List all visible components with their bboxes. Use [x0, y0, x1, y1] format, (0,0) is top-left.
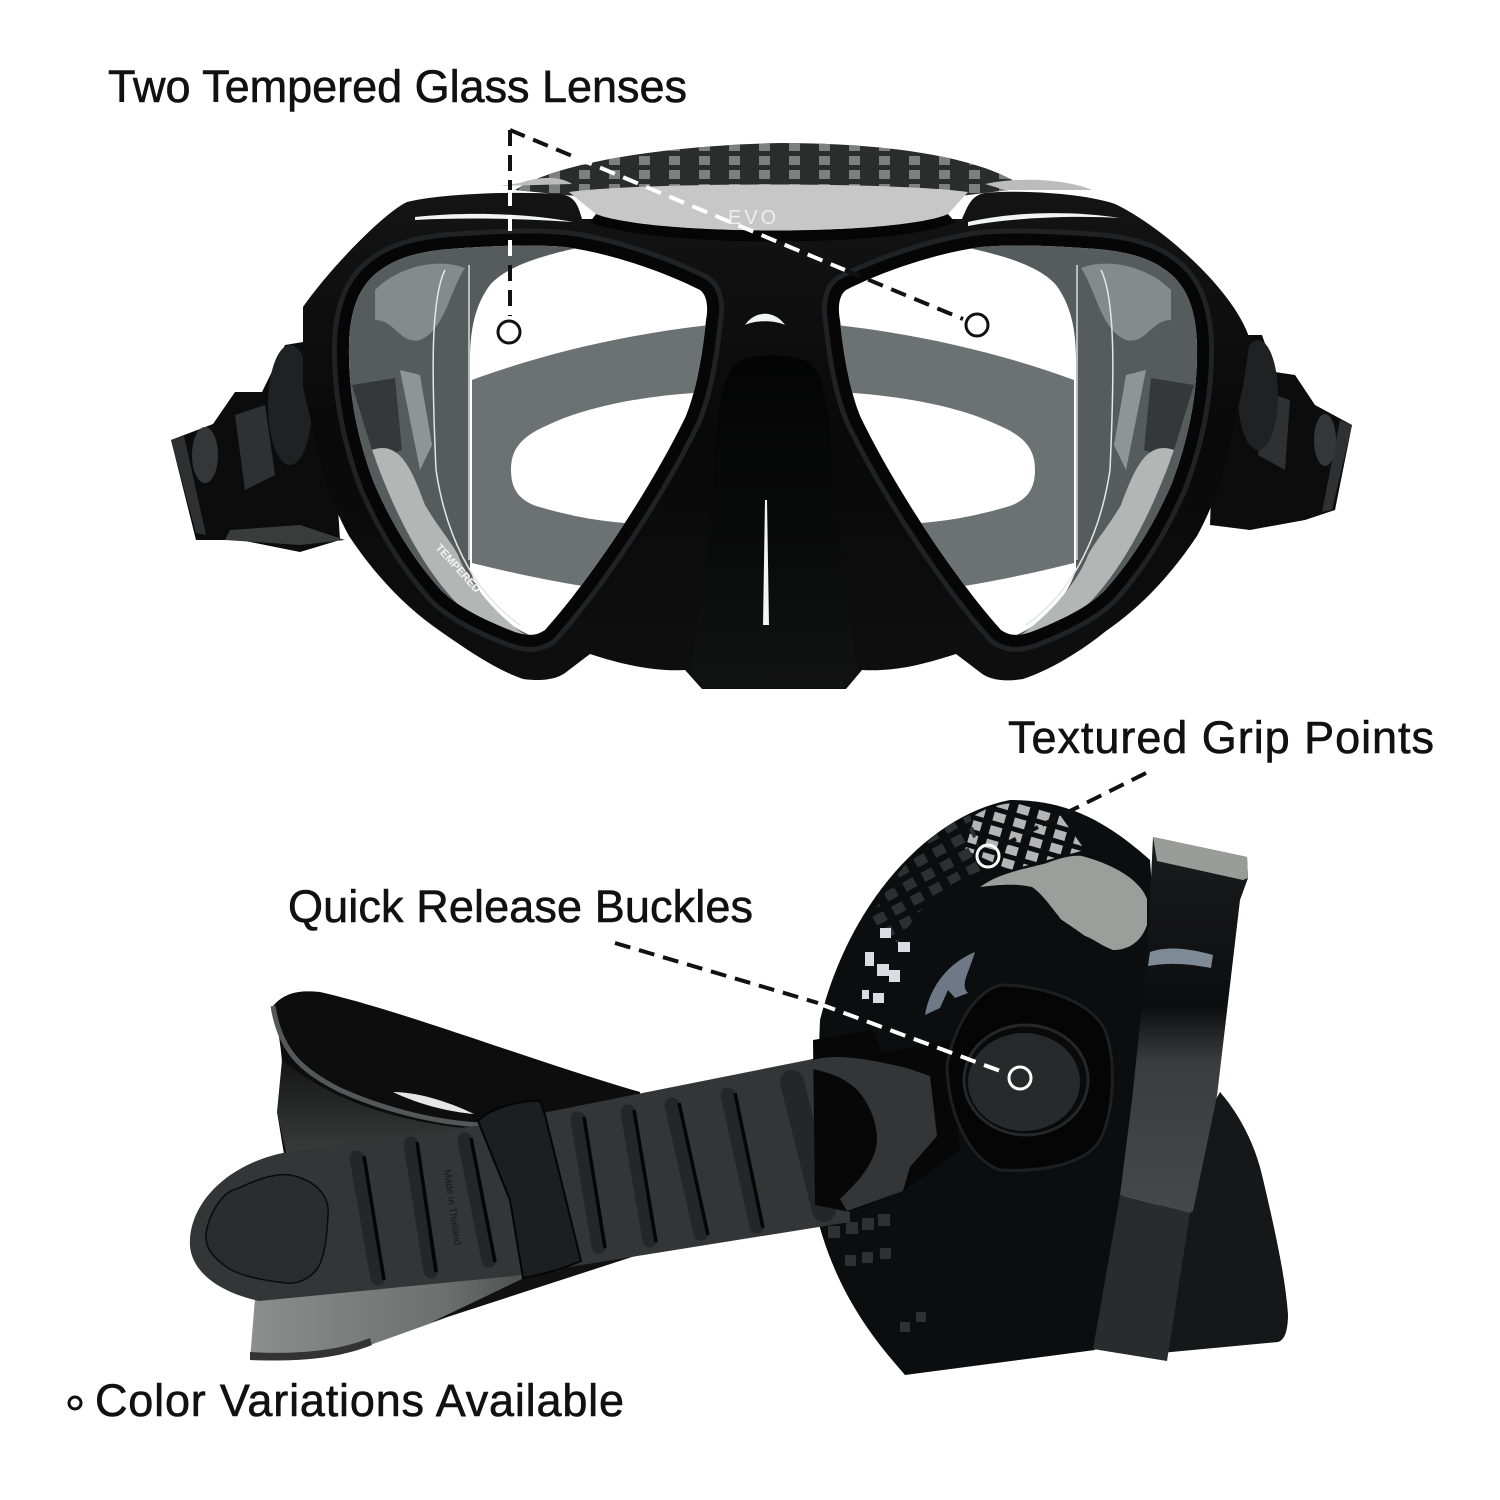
strap end pad: [206, 1175, 328, 1283]
strap lettering: Made in Thailand: [441, 1169, 463, 1246]
title: two tempered glass lenses: Two Tempered Glass Lenses: [108, 61, 687, 112]
marker: grip points: [977, 845, 999, 867]
left lens: [340, 240, 720, 640]
side skirt dome: [813, 800, 1160, 1375]
marker: buckle: [1009, 1067, 1031, 1089]
front skirt edge: [1150, 1092, 1288, 1354]
clasp: [813, 1030, 960, 1212]
gloss highlights: [415, 213, 1120, 625]
strap keeper loop: [478, 1101, 581, 1278]
grey brow of skirt: [980, 856, 1147, 950]
heading: textured grip points: Textured Grip Points: [1008, 712, 1434, 763]
frame rim right: [839, 246, 1197, 635]
note bullet: [69, 1397, 81, 1409]
right lens: [826, 240, 1206, 640]
right buckle and strap: [1210, 335, 1352, 530]
strap ribs: [357, 1082, 824, 1278]
leader lines for lenses: [510, 130, 963, 319]
brand mark on brow: EVO: [728, 207, 779, 229]
rear strap band: [250, 991, 640, 1360]
frame rim left: [349, 246, 707, 635]
front view of dive mask: [171, 140, 1352, 689]
lens frame side: [1093, 837, 1248, 1361]
lens etching: TEMPERED: [433, 542, 483, 595]
side view of dive mask: [190, 800, 1288, 1375]
marker: left lens: [498, 321, 520, 343]
mask frame: [303, 192, 1250, 689]
marker: right lens: [966, 314, 988, 336]
quick release buckle: [947, 985, 1112, 1170]
note: color variations: Color Variations Available: [95, 1375, 624, 1426]
heading: quick release buckles: Quick Release Buckles: [288, 881, 753, 932]
skirt reflection: [925, 952, 975, 1015]
strap: [190, 1050, 850, 1301]
leader lines for side view: [615, 773, 1146, 1072]
left buckle and strap: [171, 340, 345, 552]
nose pocket: [690, 355, 858, 688]
top head strap with grip squares: [515, 143, 1013, 196]
grip texture squares: [828, 803, 1085, 1332]
brow piece: [500, 178, 1092, 242]
